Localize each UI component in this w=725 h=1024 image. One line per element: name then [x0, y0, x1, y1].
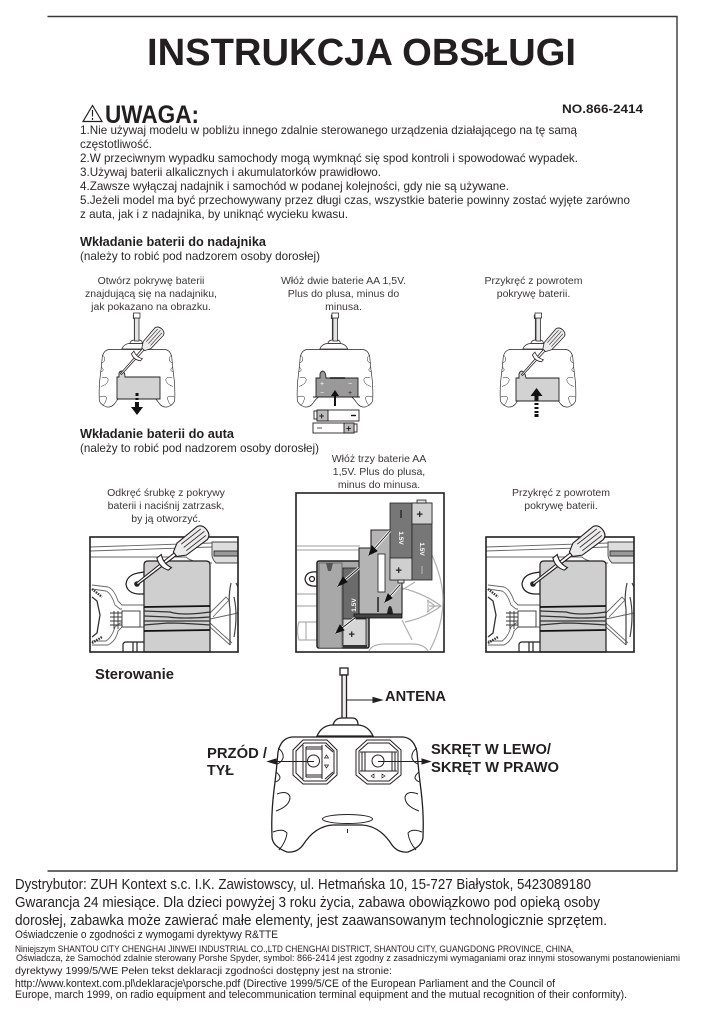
body tab: [305, 572, 317, 586]
footer: declaration of conformity: Europe, march 1999, on radio equipment and telecommunication terminal equipment and the mutual recognition of their conformity).: [15, 989, 627, 1001]
caption: unscrew car cover: by ją otworzyć.: [131, 513, 201, 525]
chassis background: [297, 546, 443, 651]
caption: close car cover: Przykręć z powrotem: [512, 487, 610, 499]
battery: in compartment: 1.5V: [351, 598, 358, 612]
caption: insert three batteries: Włóż trzy baterie AA: [332, 453, 426, 465]
label: forward back: TYŁ: [207, 763, 234, 779]
diagram: inserting two batteries in transmitter: [297, 313, 373, 434]
caption: insert two batteries: minusa.: [325, 301, 362, 313]
footer: distributor and warranty: Dystrybutor: ZUH Kontext s.c. I.K. Zawistowscy, ul. Hetmańska 10, 15-727 Białystok, 5423089180: [15, 876, 591, 893]
left stick: [293, 740, 337, 784]
battery: in compartment: +: [348, 629, 355, 641]
caption: unscrew car cover: baterii i naciśnij zatrzask,: [108, 500, 224, 512]
heading: controls: Sterowanie: [95, 667, 174, 683]
diagram: inserting two batteries in transmitter: +: [320, 381, 324, 388]
warning list: 3.Używaj baterii alkalicznych i akumulatorków prawidłowo.: [80, 165, 381, 179]
right stick: [356, 740, 401, 784]
diagram: inserting two batteries in transmitter: −: [320, 390, 324, 397]
diagram: unscrewing car cover: [90, 523, 238, 652]
heading: transmitter batteries: Wkładanie baterii do nadajnika: [80, 235, 267, 249]
battery: front left: +: [396, 565, 402, 577]
diagram: inserting two batteries in transmitter: −: [348, 381, 352, 388]
arrow: antenna: [347, 698, 382, 702]
diagram: screwing car cover back: [486, 523, 634, 652]
caption: unscrew car cover: [107, 487, 226, 525]
footer: declaration of conformity: [15, 929, 680, 1001]
footer: distributor and warranty: [15, 876, 607, 929]
battery: front right: 1.5V: [418, 542, 425, 556]
battery door oval: [322, 814, 372, 824]
battery: lower: +: [346, 424, 351, 434]
model number: NO.866-2414: [562, 102, 643, 116]
caption: insert two batteries: Włóż dwie baterie AA 1,5V.: [281, 275, 406, 287]
footer: declaration of conformity: Oświadcza, że Samochód zdalnie sterowany Porshe Spyder, symbol: 866-2414 jest zgodny z zasadniczymi wymaganiami oraz innymi stosowanymi postanowieniami: [16, 953, 680, 964]
icon: warning triangle: [83, 106, 102, 122]
caption: close car cover: [512, 487, 610, 512]
heading: car batteries: [80, 427, 319, 455]
battery: front left: [390, 503, 412, 583]
caption: open transmitter cover: Otwórz pokrywę baterii: [98, 275, 204, 287]
warning list: 5.Jeżeli model ma być przechowywany przez długi czas, wszystkie baterie powinny zostać wyjęte zarówno: [80, 193, 630, 207]
diagram: transmitter controls: [272, 668, 423, 852]
warning list: [80, 123, 630, 221]
footer: declaration of conformity: dyrektywy 1999/5/WE Pełen tekst deklaracji zgodności dostępny jest na stronie:: [15, 965, 392, 977]
title: INSTRUKCJA OBSŁUGI: [147, 32, 576, 74]
warning list: 1.Nie używaj modelu w pobliżu innego zdalnie sterowanego urządzenia działającego na tę samą: [80, 123, 577, 137]
footer: distributor and warranty: dorosłej, zabawka może zawierać małe elementy, jest zaawansowanym technologicznie sprzętem.: [15, 912, 607, 929]
label: antenna: ANTENA: [385, 689, 447, 705]
insertion arrows: [336, 531, 400, 633]
heading: transmitter batteries: (należy to robić pod nadzorem osoby dorosłej): [80, 249, 320, 263]
compartment tray: [317, 561, 369, 648]
caption: open transmitter cover: jak pokazano na obrazku.: [90, 301, 211, 313]
caption: insert two batteries: [281, 275, 406, 313]
diagram: opening transmitter cover: [99, 313, 175, 415]
battery: in compartment: [343, 568, 367, 648]
label: steering: [431, 742, 559, 776]
diagram: closing transmitter cover: [500, 313, 576, 417]
arrow: steering: [378, 759, 430, 764]
battery: upper: +: [319, 411, 324, 421]
page frame: [48, 16, 677, 871]
label: steering: SKRĘT W PRAWO: [431, 760, 559, 776]
footer: distributor and warranty: Gwarancja 24 miesiące. Dla dzieci powyżej 3 roku życia, zabawa obowiązkowo pod opieką osoby: [15, 894, 600, 911]
caption: open transmitter cover: znajdującą się na nadajniku,: [85, 288, 217, 300]
warning list: częstotliwość.: [80, 137, 152, 151]
warning heading: UWAGA:: [105, 101, 199, 129]
caption: close transmitter cover: [484, 275, 583, 300]
caption: close transmitter cover: pokrywę baterii.: [497, 288, 570, 300]
warning list: z auta, jak i z nadajnika, by uniknąć wycieku kwasu.: [80, 207, 348, 221]
warning list: 2.W przeciwnym wypadku samochody mogą wymknąć się spod kontroli i spowodować wypadek.: [80, 151, 578, 165]
battery: front left: 1.5V: [397, 531, 404, 545]
caption: insert two batteries: Plus do plusa, minus do: [288, 288, 399, 300]
heading: car batteries: (należy to robić pod nadzorem osoby dorosłej): [80, 441, 319, 455]
caption: close car cover: pokrywę baterii.: [524, 500, 598, 512]
arrow: forward back: [268, 759, 314, 764]
heading: transmitter batteries: [80, 235, 320, 263]
label: forward back: PRZÓD /: [207, 744, 267, 762]
caption: unscrew car cover: Odkręć śrubkę z pokrywy: [107, 487, 226, 499]
label: steering: SKRĘT W LEWO/: [431, 742, 551, 758]
diagram: inserting two batteries in transmitter: +: [348, 390, 352, 397]
caption: close transmitter cover: Przykręć z powrotem: [484, 275, 583, 287]
caption: insert three batteries: minus do minusa.: [338, 479, 420, 491]
diagram: car battery compartment: [296, 493, 444, 652]
label: forward back: [207, 744, 267, 779]
footer: declaration of conformity: Oświadczenie o zgodności z wymogami dyrektywy R&TTE: [15, 929, 278, 941]
open cover: [359, 530, 402, 614]
footer: declaration of conformity: Niniejszym SHANTOU CITY CHENGHAI JINWEI INDUSTRIAL CO.,LTD CHENGHAI DISTRICT, SHANTOU CITY, GUANGDONG PROVINCE, CHINA,: [15, 944, 574, 955]
caption: insert three batteries: 1,5V. Plus do plusa,: [333, 466, 425, 478]
heading: car batteries: Wkładanie baterii do auta: [80, 427, 235, 441]
battery: front right: [412, 500, 432, 580]
caption: insert three batteries: [332, 453, 426, 491]
battery: front right: +: [416, 509, 423, 521]
warning list: 4.Zawsze wyłączaj nadajnik i samochód w podanej kolejności, gdy nie są używane.: [80, 179, 509, 193]
caption: open transmitter cover: [85, 275, 217, 313]
footer: declaration of conformity: http://www.kontext.com.pl\deklaracje\porsche.pdf (Directive 1999/5/CE of the European Parliament and the Council of: [15, 978, 556, 990]
